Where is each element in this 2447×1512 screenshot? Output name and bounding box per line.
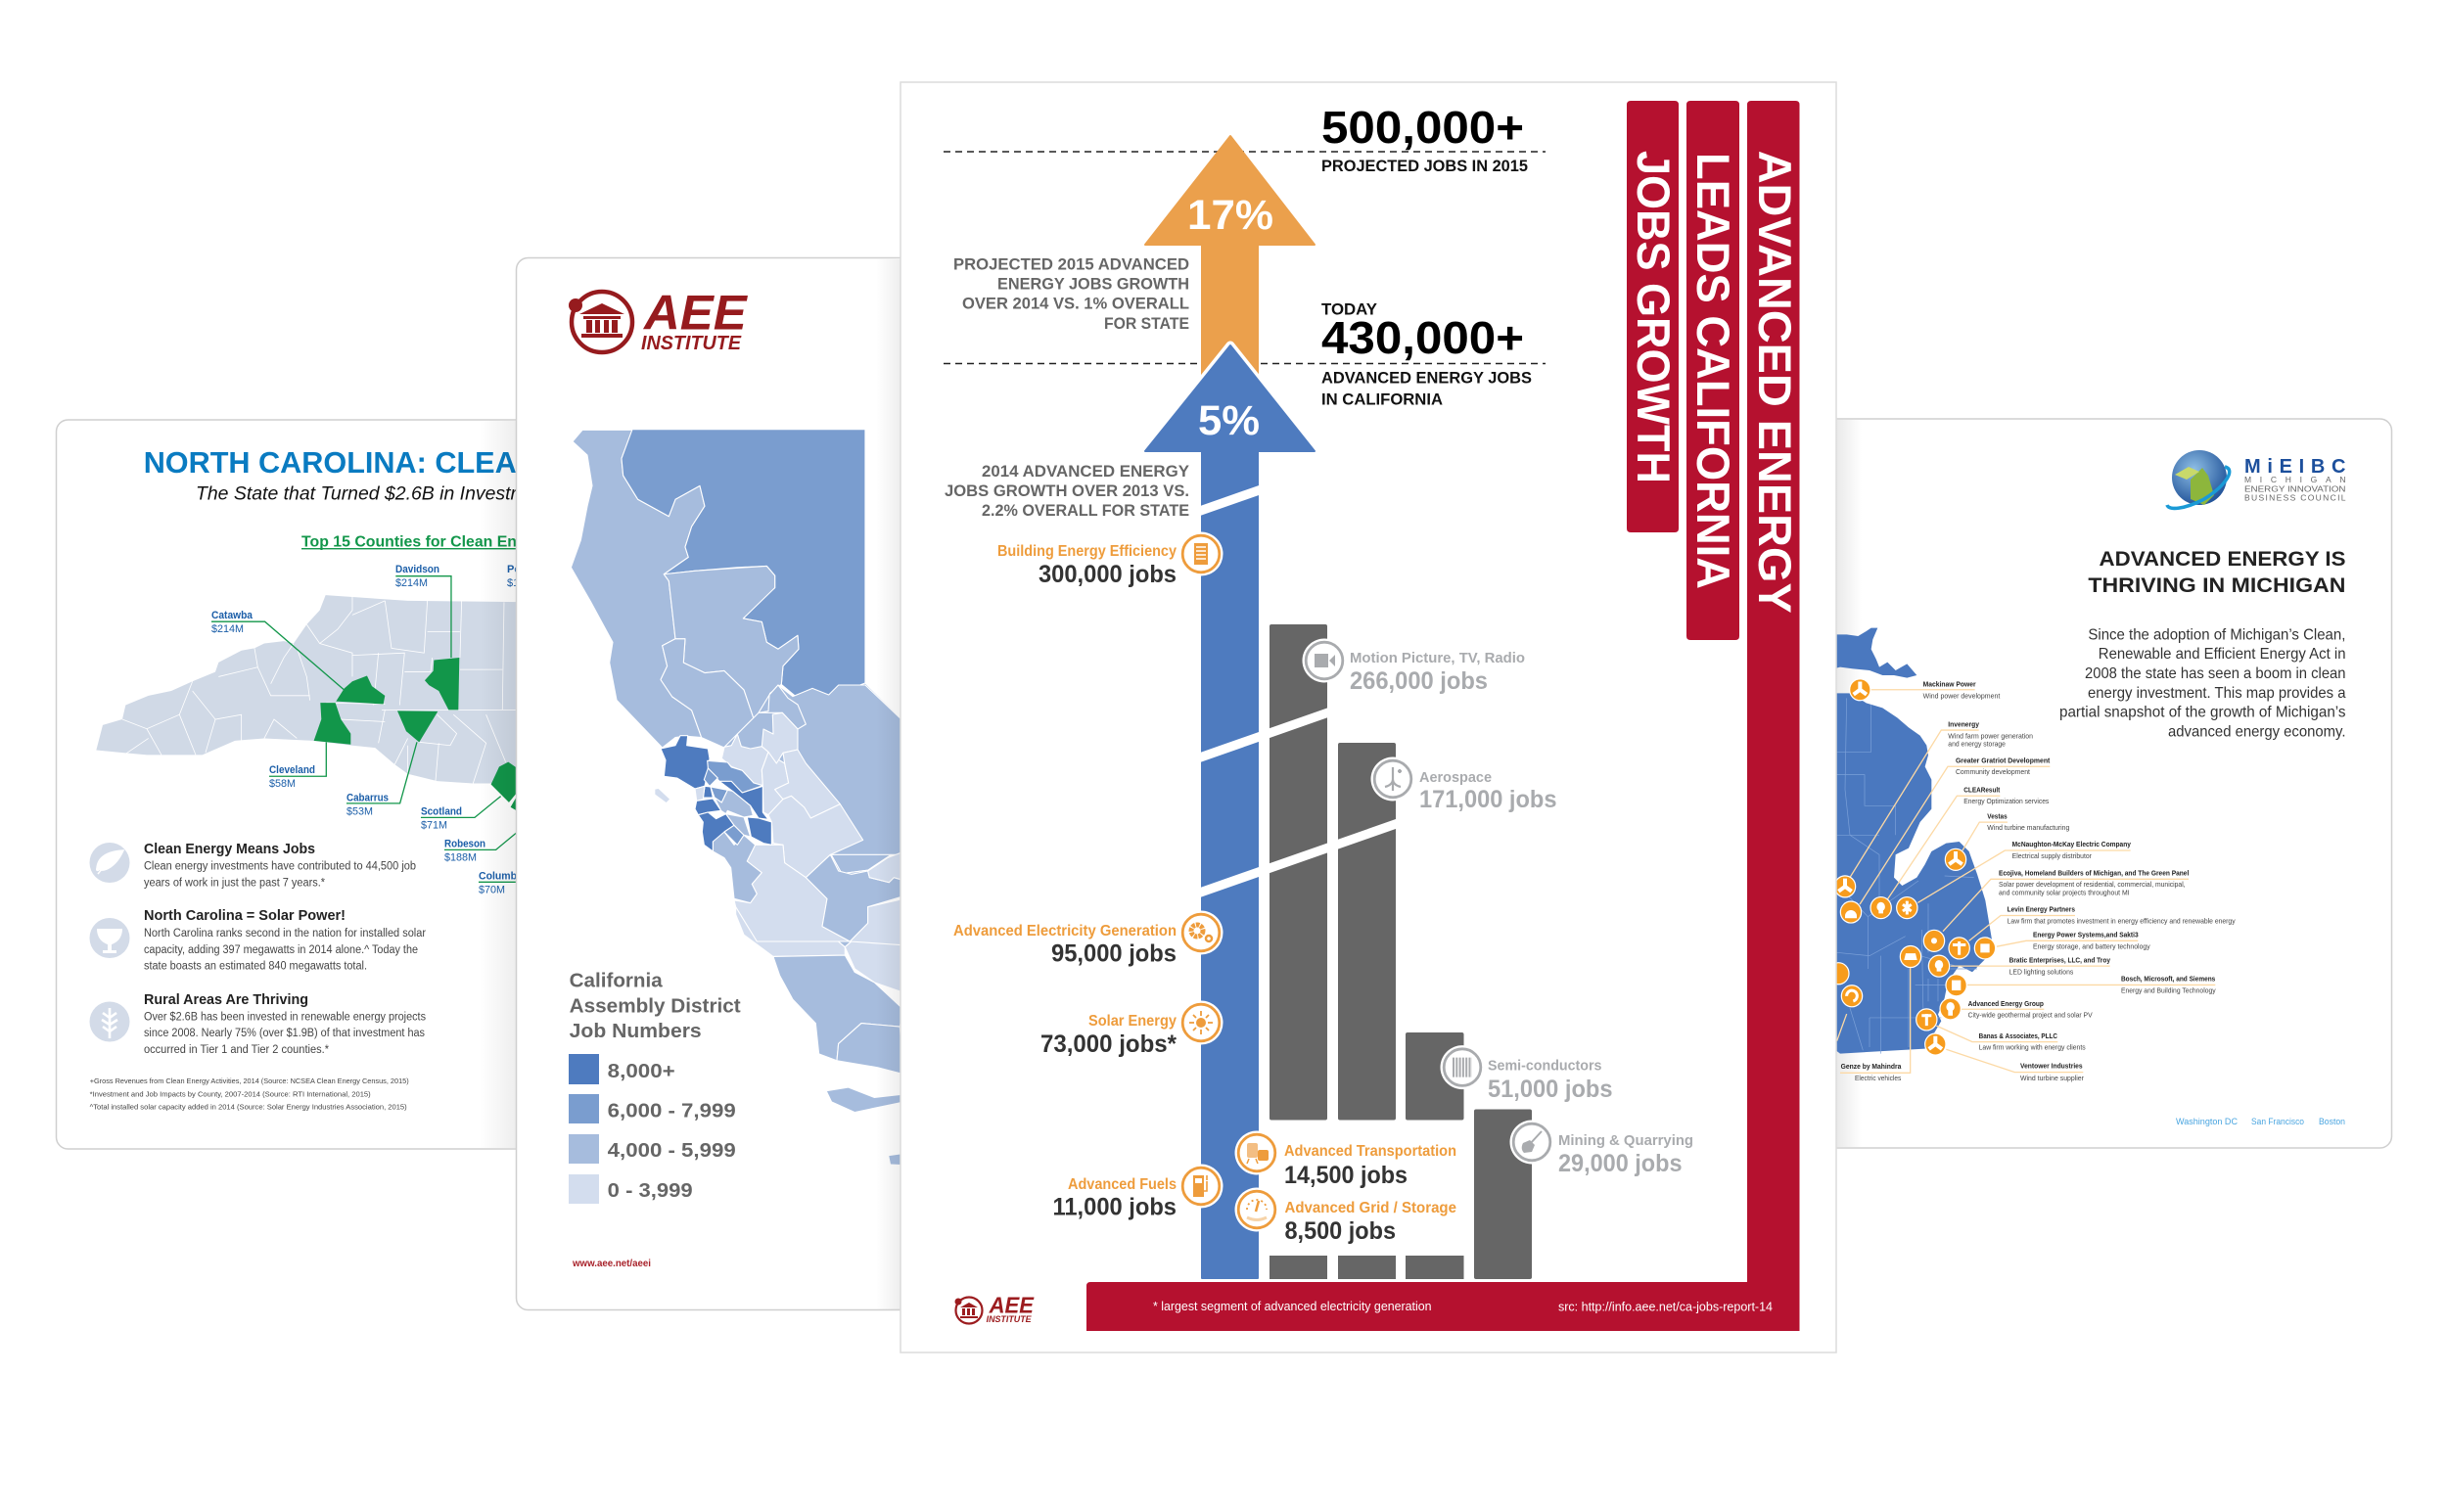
footer notes [1153, 1299, 1773, 1313]
map: Bay Area and central districts [655, 685, 917, 946]
county labels [211, 564, 520, 896]
footnotes: *Investment and Job Impacts by County, 2007-2014 (Source: RTI International, 2015) [90, 1089, 371, 1098]
logo: MiEIBC: BUSINESS COUNCIL [2244, 493, 2346, 503]
project labels: Community development [1956, 769, 2030, 776]
logo: AEE Institute: INSTITUTE [641, 333, 742, 354]
label: motion picture [1350, 650, 1525, 695]
body text: advanced energy economy. [2168, 724, 2345, 741]
county labels: $71M [421, 820, 447, 832]
county labels: Scotland [421, 806, 462, 818]
headline numbers [1321, 102, 1532, 409]
logo: MiEIBC: MICHIGAN [2244, 475, 2345, 484]
project labels: Wind power development [1923, 693, 2000, 700]
label: motion picture: 266,000 jobs [1350, 667, 1488, 695]
block: rural areas: Rural Areas Are Thriving [144, 992, 308, 1008]
label: solar energy [1040, 1013, 1177, 1058]
project labels: Wind turbine manufacturing [1987, 825, 2070, 832]
logo: AEE small: INSTITUTE [987, 1314, 1032, 1325]
block: solar power [144, 908, 426, 973]
icon: camera [1302, 638, 1347, 683]
project labels: Advanced Energy Group [1968, 1001, 2044, 1008]
note: 2015 growth: FOR STATE [1104, 314, 1189, 333]
county labels: Cleveland [269, 764, 315, 776]
arrow: 17% projected: 17% [1187, 192, 1273, 239]
headline numbers: IN CALIFORNIA [1321, 389, 1443, 409]
logo: MiEIBC [2167, 450, 2346, 508]
body text: energy investment. This map provides a [2088, 685, 2346, 702]
icon: trophy [90, 918, 129, 958]
title band: red bars [1086, 101, 1801, 1331]
icon: shovel [1509, 1120, 1554, 1165]
logo: AEE Institute: AEE [642, 286, 748, 341]
website url: www.aee.net/aeei [572, 1259, 651, 1269]
logo: MiEIBC: ENERGY INNOVATION [2244, 484, 2345, 494]
note: 2015 growth: PROJECTED 2015 ADVANCED [953, 254, 1189, 274]
label: solar energy: 73,000 jobs* [1040, 1031, 1177, 1058]
block: solar power: capacity, adding 397 megawatts in 2014 alone.^ Today the [144, 944, 418, 956]
icon: fuel pump [1178, 1165, 1224, 1208]
icon: building [1178, 532, 1224, 575]
county labels: $70M [479, 885, 505, 896]
fade on North Carolina panel [480, 421, 517, 1148]
office locations: San Francisco [2251, 1117, 2304, 1126]
label: advanced grid storage [1284, 1200, 1456, 1245]
label: mining [1558, 1132, 1693, 1177]
body text: 2008 the state has seen a boom in clean [2085, 665, 2345, 682]
block: clean energy means jobs: Clean energy investments have contributed to 44,500 job [144, 861, 416, 873]
body text: partial snapshot of the growth of Michigan’s [2059, 705, 2345, 721]
legend [569, 971, 741, 1204]
office locations: Boston [2319, 1117, 2345, 1126]
legend: Job Numbers [570, 1021, 702, 1042]
icon: gears [1178, 910, 1224, 955]
fade on California panel [876, 259, 901, 1309]
dashed guide lines [944, 152, 1546, 364]
label: semiconductors [1488, 1057, 1613, 1103]
county labels: $188M [444, 851, 477, 863]
panel: California [517, 258, 1006, 1309]
label: aerospace [1419, 769, 1556, 813]
body text: Renewable and Efficient Energy Act in [2099, 646, 2345, 663]
county labels: Pe [507, 564, 520, 575]
logo: AEE small: AEE [989, 1293, 1035, 1318]
icon: sun [1178, 1000, 1224, 1045]
legend: 6,000 - 7,999 [608, 1100, 736, 1122]
project labels: McNaughton-McKay Electric Company [2012, 842, 2131, 848]
logo: AEE Institute [569, 286, 748, 354]
label: motion picture: Motion Picture, TV, Radio [1350, 650, 1525, 666]
heading: THRIVING IN MICHIGAN [2088, 574, 2345, 597]
red title text: JOBS GROWTH [1628, 151, 1680, 483]
project labels: Greater Gratriot Development [1956, 757, 2051, 765]
headline numbers: PROJECTED JOBS IN 2015 [1321, 157, 1528, 175]
project labels: and energy storage [1948, 742, 2006, 749]
red title text: LEADS CALIFORNIA [1687, 153, 1739, 589]
icon: chip [1441, 1045, 1484, 1089]
heading [2088, 548, 2345, 597]
label: advanced fuels: 11,000 jobs [1053, 1194, 1177, 1221]
block: clean energy means jobs: Clean Energy Means Jobs [144, 842, 315, 857]
note: 2014 growth: 2014 ADVANCED ENERGY [982, 462, 1190, 481]
block: rural areas [144, 992, 426, 1056]
footer notes: * largest segment of advanced electricity generation [1153, 1299, 1431, 1313]
note: 2014 growth: 2.2% OVERALL FOR STATE [982, 501, 1189, 520]
project labels: Bosch, Microsoft, and Siemens [2121, 977, 2216, 984]
label: advanced transportation: 14,500 jobs [1284, 1162, 1408, 1189]
map: California north and south [571, 430, 903, 1165]
icon: leaf [90, 843, 129, 883]
label: building energy efficiency [997, 543, 1177, 588]
map heading: Top 15 Counties for Clean En [301, 534, 517, 550]
label: advanced fuels: Advanced Fuels [1068, 1176, 1177, 1193]
axis break stripes [1196, 488, 1400, 893]
project icons [1828, 679, 1996, 1055]
project labels: Mackinaw Power [1923, 681, 1976, 688]
connector lines [1837, 690, 2215, 1073]
county labels: $214M [211, 623, 244, 635]
panel: North Carolina [57, 420, 605, 1149]
project labels: Bratic Enterprises, LLC, and Troy [2009, 957, 2110, 964]
label: advanced electricity generation: 95,000 jobs [1051, 939, 1177, 967]
bar chart: other sectors [1270, 624, 1532, 1279]
project labels: Energy and Building Technology [2121, 988, 2216, 995]
arrow: 5% current [1145, 345, 1315, 1278]
project labels: Energy Optimization services [1963, 799, 2050, 805]
project labels: Ecojiva, Homeland Builders of Michigan, and The Green Panel [1999, 870, 2189, 878]
label: advanced electricity generation: Advanced Electricity Generation [953, 923, 1177, 939]
label: aerospace: 171,000 jobs [1419, 786, 1556, 813]
label: semiconductors: Semi-conductors [1488, 1057, 1601, 1075]
icon: vehicles [1235, 1131, 1278, 1174]
label: mining: Mining & Quarrying [1558, 1132, 1693, 1149]
block: rural areas: since 2008. Nearly 75% (over $1.9B) of that investment has [144, 1028, 425, 1039]
map: NC counties [96, 576, 538, 882]
label: advanced fuels [1053, 1176, 1177, 1221]
legend: 8,000+ [608, 1061, 675, 1082]
logo: MiEIBC: MiEIBC [2244, 456, 2345, 478]
note: 2015 growth: OVER 2014 VS. 1% OVERALL [962, 295, 1189, 313]
project labels: Law firm that promotes investment in energy efficiency and renewable energy [2008, 918, 2236, 925]
project labels: Genze by Mahindra [1841, 1064, 1902, 1071]
map: Michigan outline [1833, 628, 1992, 1054]
label: building energy efficiency: Building Energy Efficiency [997, 543, 1177, 560]
project labels: LED lighting solutions [2009, 969, 2074, 976]
subtitle: The State that Turned $2.6B in Investr [196, 483, 518, 505]
panel: California jobs growth [900, 82, 1836, 1352]
label: mining: 29,000 jobs [1558, 1150, 1682, 1177]
label: advanced transportation: Advanced Transportation [1284, 1143, 1456, 1160]
footer notes: src: http://info.aee.net/ca-jobs-report-14 [1558, 1300, 1773, 1313]
county labels: $214M [395, 577, 428, 589]
project labels: and community solar projects throughout MI [1999, 890, 2130, 897]
project labels [1841, 681, 2236, 1082]
note: 2014 growth: JOBS GROWTH OVER 2013 VS. [945, 481, 1189, 500]
label: advanced grid storage: Advanced Grid / Storage [1284, 1200, 1456, 1216]
legend: California [570, 971, 664, 992]
county labels: Davidson [395, 564, 439, 575]
project labels: Levin Energy Partners [2008, 907, 2075, 914]
project labels: Electrical supply distributor [2012, 853, 2093, 860]
headline numbers: 430,000+ [1321, 312, 1524, 363]
county labels: Columb [479, 871, 517, 883]
arrow: 5% current: 5% [1198, 397, 1260, 444]
icon: aerospace [1370, 757, 1415, 801]
legend: Assembly District [570, 995, 741, 1017]
county labels: $58M [269, 778, 296, 790]
county labels: Cabarrus [346, 793, 389, 804]
block: clean energy means jobs [144, 842, 416, 890]
project labels: Energy Power Systems,and Sakti3 [2033, 932, 2139, 939]
office locations: Washington DC [2176, 1117, 2238, 1126]
project labels: Wind farm power generation [1948, 733, 2033, 740]
label: semiconductors: 51,000 jobs [1488, 1076, 1613, 1103]
office locations [2176, 1117, 2345, 1126]
headline numbers: 500,000+ [1321, 102, 1524, 153]
county labels: Robeson [444, 838, 485, 849]
project labels: Law firm working with energy clients [1979, 1044, 2086, 1052]
note: 2014 growth [945, 462, 1190, 520]
project labels: Invenergy [1948, 722, 1979, 729]
footnotes [90, 1077, 409, 1112]
label: advanced grid storage: 8,500 jobs [1284, 1217, 1396, 1245]
body text [2059, 626, 2346, 741]
footnotes: ^Total installed solar capacity added in 2014 (Source: Solar Energy Industries Association, 2015) [90, 1102, 407, 1112]
block: rural areas: occurred in Tier 1 and Tier 2 counties.* [144, 1044, 329, 1056]
project labels: Electric vehicles [1855, 1076, 1902, 1082]
label: aerospace: Aerospace [1419, 769, 1492, 786]
project labels: Banas & Associates, PLLC [1979, 1033, 2057, 1040]
county labels: $53M [346, 806, 373, 818]
block: solar power: North Carolina ranks second in the nation for installed solar [144, 928, 426, 939]
heading: ADVANCED ENERGY IS [2099, 548, 2345, 571]
block: solar power: North Carolina = Solar Power! [144, 908, 346, 924]
red title text: ADVANCED ENERGY [1749, 151, 1801, 614]
label: advanced transportation [1284, 1143, 1456, 1189]
block: clean energy means jobs: years of work in just the past 7 years.* [144, 878, 325, 890]
note: 2015 growth [953, 254, 1189, 333]
county labels: Catawba [211, 610, 254, 621]
project labels: Ventower Industries [2020, 1063, 2083, 1071]
legend: 0 - 3,999 [608, 1180, 693, 1202]
body text: Since the adoption of Michigan’s Clean, [2088, 626, 2345, 643]
label: building energy efficiency: 300,000 jobs [1039, 561, 1177, 588]
project labels: Energy storage, and battery technology [2033, 944, 2150, 951]
headline numbers: ADVANCED ENERGY JOBS [1321, 369, 1532, 388]
footnotes: +Gross Revenues from Clean Energy Activities, 2014 (Source: NCSEA Clean Energy Census, 2015) [90, 1077, 409, 1085]
title: NORTH CAROLINA: CLEA [144, 445, 517, 480]
panel: Michigan [1762, 419, 2392, 1148]
legend: 4,000 - 5,999 [608, 1140, 736, 1162]
arrow: 17% projected [1145, 136, 1315, 377]
label: advanced electricity generation [953, 923, 1177, 967]
icon: wheat [90, 1002, 129, 1041]
project labels: Vestas [1987, 813, 2008, 820]
project labels: CLEAResult [1963, 787, 2001, 794]
label: solar energy: Solar Energy [1088, 1013, 1177, 1030]
project labels: Wind turbine supplier [2020, 1076, 2085, 1082]
red title text [1628, 151, 1801, 614]
project labels: Solar power development of residential, commercial, municipal, [1999, 882, 2186, 889]
logo: AEE small [955, 1293, 1035, 1325]
county labels: $1 [507, 577, 519, 589]
icon: gauge [1235, 1188, 1278, 1231]
headline numbers: TODAY [1321, 299, 1378, 319]
project labels: City-wide geothermal project and solar PV [1968, 1012, 2093, 1020]
note: 2015 growth: ENERGY JOBS GROWTH [997, 275, 1189, 294]
block: rural areas: Over $2.6B has been invested in renewable energy projects [144, 1011, 426, 1023]
block: solar power: state boasts an estimated 840 megawatts total. [144, 961, 367, 973]
map: Michigan markers and labels [1828, 679, 2236, 1082]
